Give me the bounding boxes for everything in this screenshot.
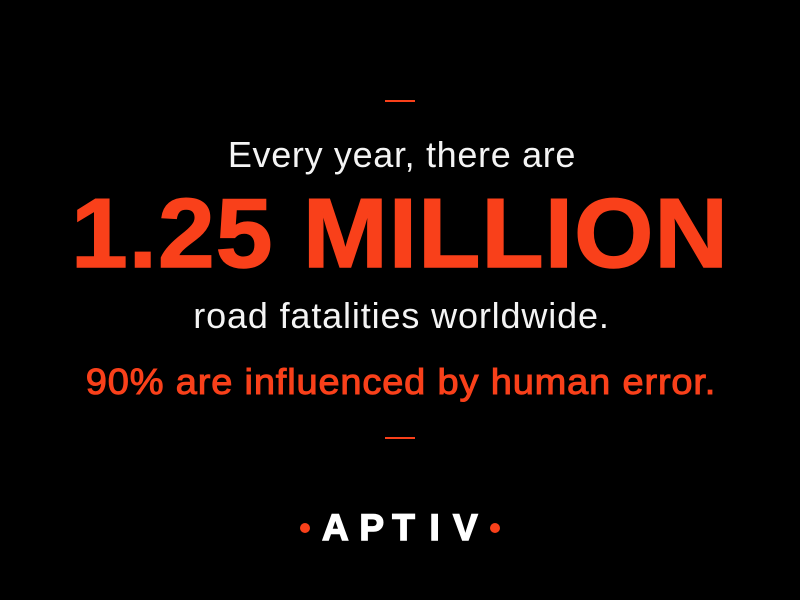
- logo: Aptiv: [300, 507, 500, 548]
- logo right dot: [490, 523, 500, 533]
- bottom divider: [385, 437, 415, 439]
- logo wordmark: A: [322, 507, 349, 548]
- logo wordmark: I: [430, 507, 440, 548]
- logo wordmark: [322, 507, 478, 548]
- logo wordmark: V: [453, 507, 478, 548]
- logo wordmark: P: [359, 507, 384, 548]
- logo wordmark: T: [392, 507, 415, 548]
- road fatalities text: road fatalities worldwide.: [193, 295, 610, 336]
- headline statistic: 1.25 MILLION: [71, 178, 729, 288]
- top divider: [385, 100, 415, 102]
- logo left dot: [300, 523, 310, 533]
- human error statement: 90% are influenced by human error.: [86, 361, 716, 402]
- intro text: Every year, there are: [228, 134, 576, 175]
